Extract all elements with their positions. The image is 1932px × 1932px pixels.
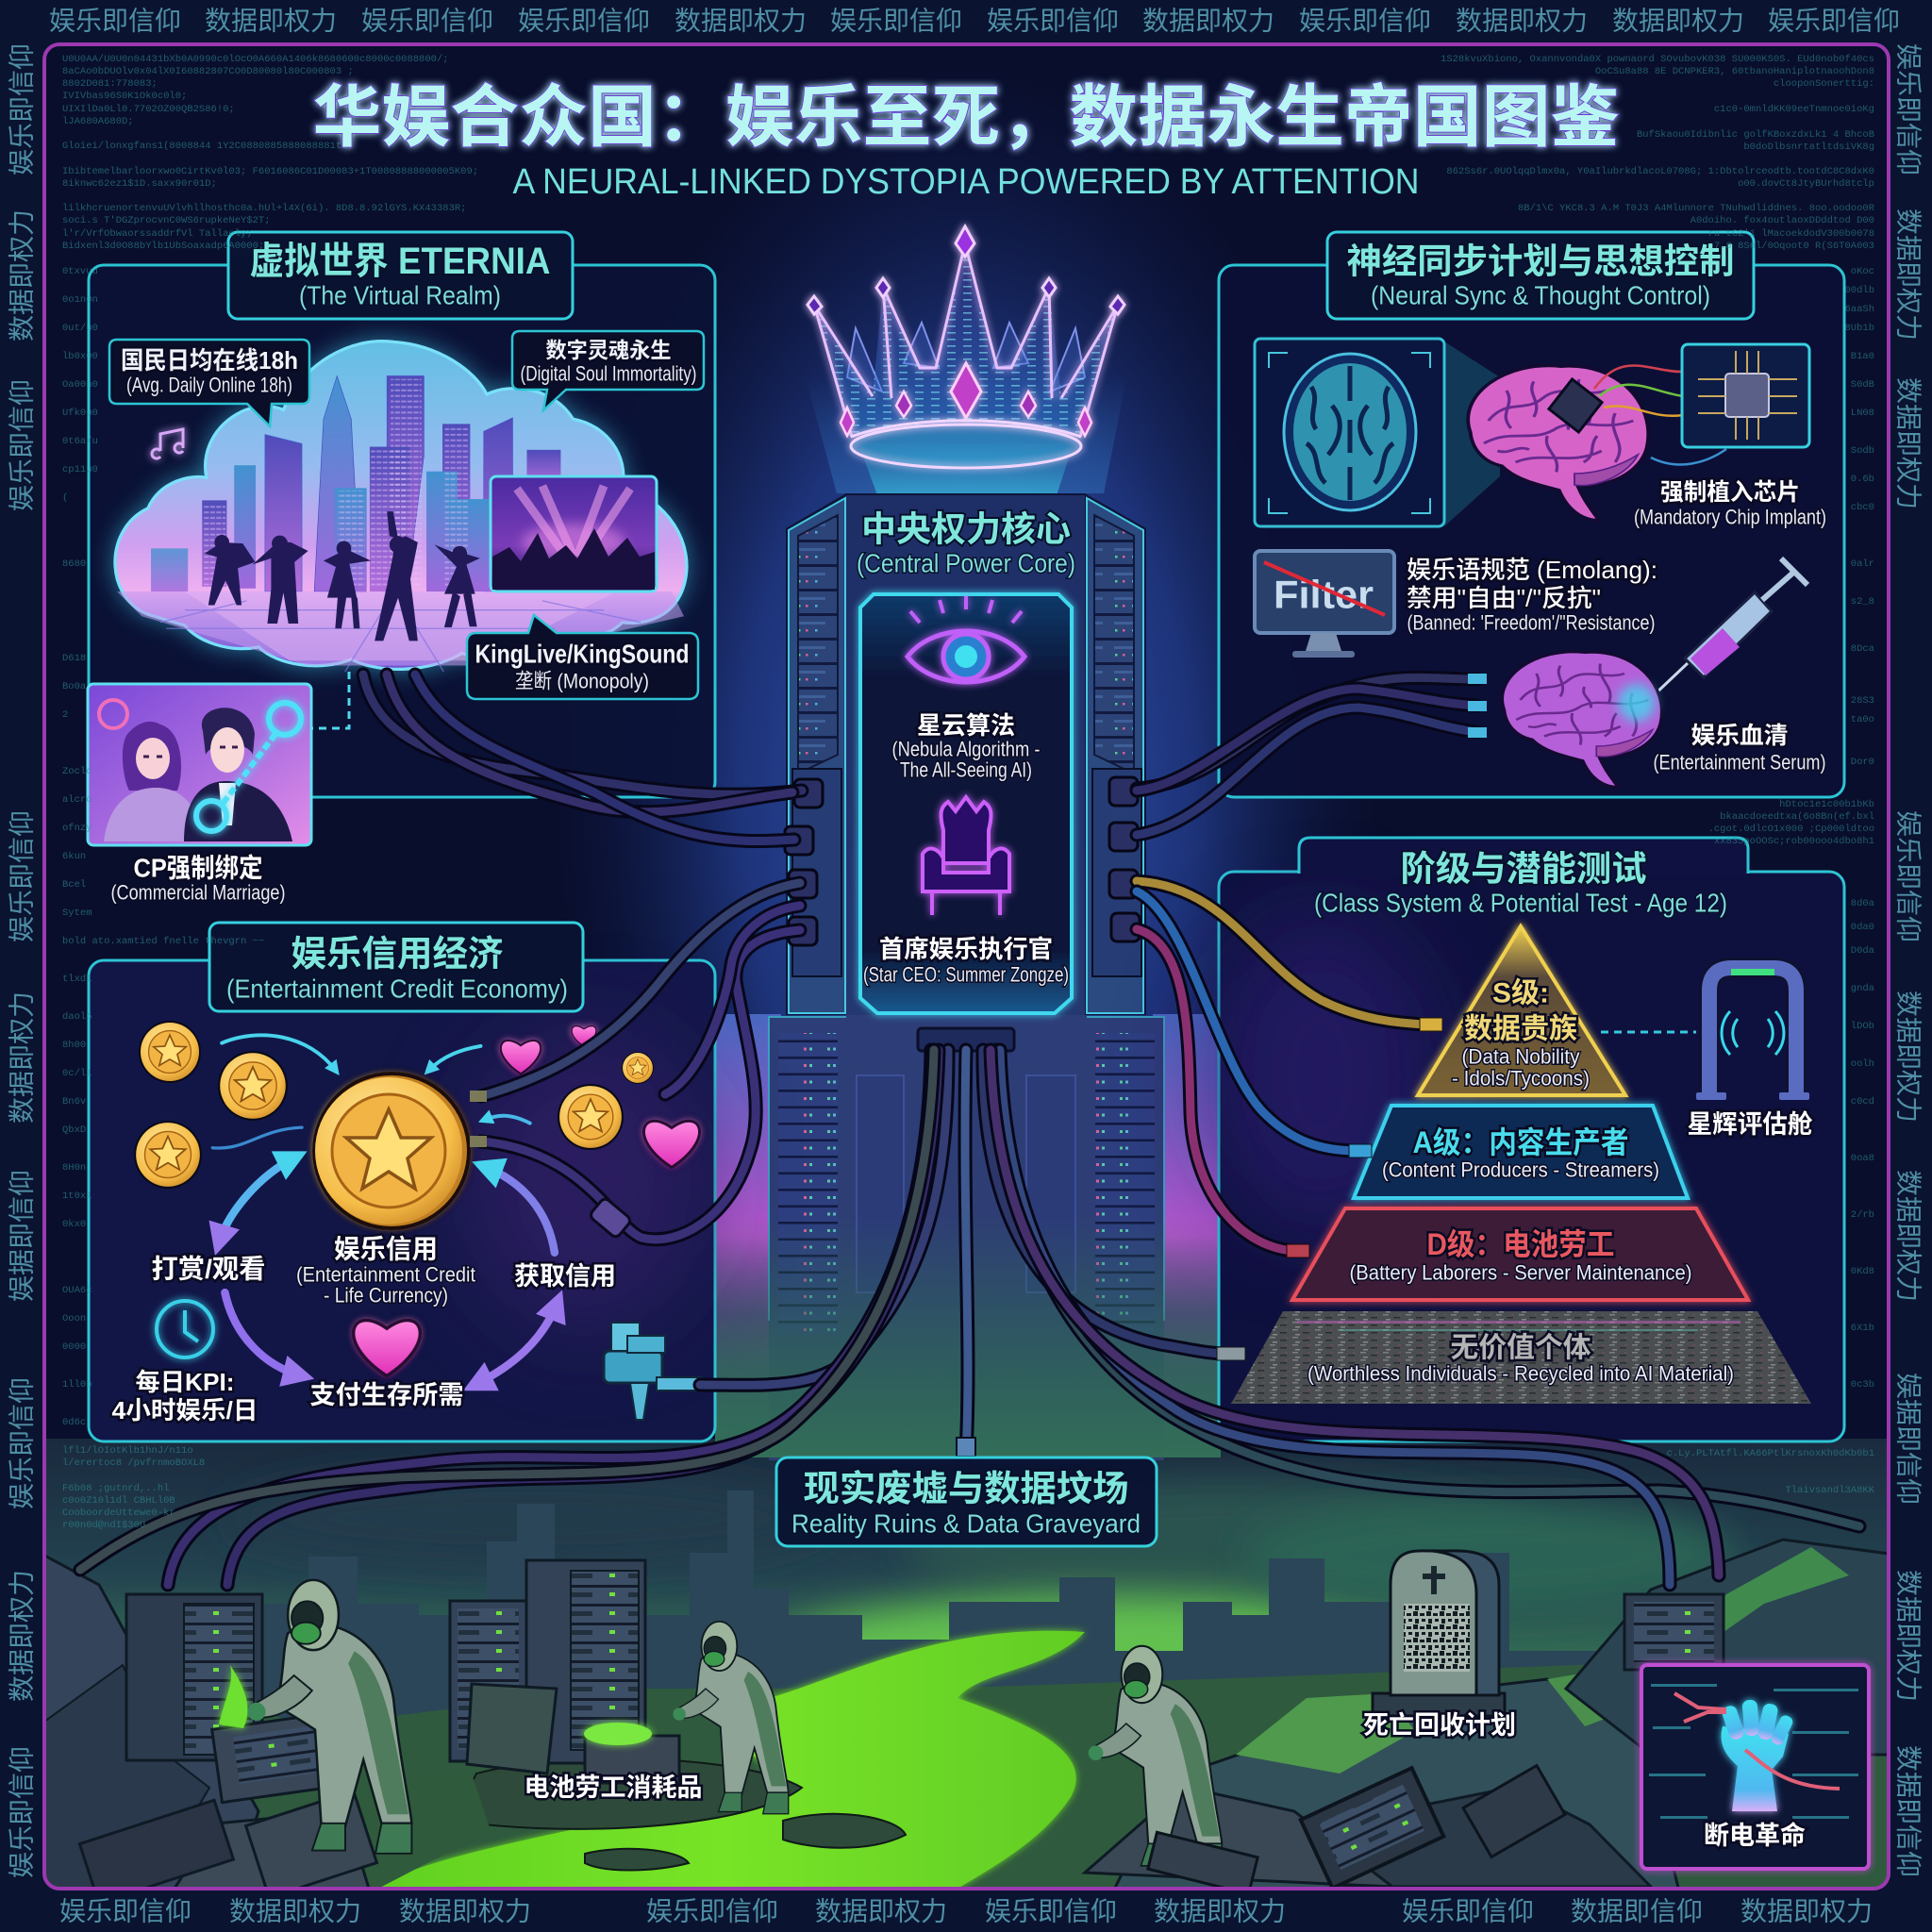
code stream right column: D0da: [1851, 945, 1874, 957]
upper rack left: [798, 515, 838, 774]
code stream left column: 1t0x1: [62, 1191, 92, 1202]
callout: digital soul: [512, 331, 704, 410]
label: serum: (Entertainment Serum): [1653, 751, 1826, 774]
cable socket: [918, 1028, 1014, 1051]
tombstone with QR code: [1373, 1551, 1505, 1716]
hazmat worker 1: [247, 1580, 411, 1854]
margin slogans top: 数据即权力: [205, 6, 337, 36]
margin slogans bottom: 数据即信仰: [1571, 1896, 1703, 1926]
code stream right column: oKoc: [1851, 266, 1874, 277]
purple backdrop left of tower: [715, 1014, 781, 1457]
margin slogans bottom: 娱乐即信仰: [985, 1896, 1117, 1926]
label: chip implant: 强制植入芯片: [1660, 478, 1800, 506]
code stream left column: 0d6c: [62, 1417, 86, 1428]
text labels: 娱乐信用: [334, 1234, 438, 1264]
label: battery consumables: 电池劳工消耗品: [525, 1774, 702, 1802]
margin slogans left: 数据即权力: [8, 209, 36, 341]
pyramid: A tier: A级：内容生产者: [1413, 1125, 1628, 1159]
margin slogans bottom: 数据即权力: [1740, 1896, 1873, 1926]
code stream right column: .cgot.0dlcO1x000 ;Cp000ldtoo: [1708, 824, 1874, 835]
margin slogans bottom: 数据即权力: [229, 1896, 361, 1926]
brain with chip: [1468, 366, 1726, 521]
code stream left column: 0ut/u0: [62, 323, 98, 334]
margin slogans top: 娱乐即信仰: [518, 6, 650, 36]
code stream top left: lJA680A680D;: [62, 116, 134, 127]
margin slogans right: [1894, 43, 1923, 1877]
label: evaluation pod: 星辉评估舱: [1687, 1110, 1813, 1139]
purple backdrop right of tower: [1153, 1014, 1221, 1457]
pyramid: A tier: (Content Producers - Streamers): [1382, 1158, 1659, 1181]
heading: class system: (Class System & Potential Test - Age 12): [1314, 889, 1727, 917]
margin slogans right: 数据即权力: [1894, 208, 1923, 341]
central tower labels: 中央权力核心: [861, 509, 1071, 549]
callout: daily online: (Avg. Daily Online 18h): [126, 374, 292, 396]
code stream left column: 0kx0: [62, 1219, 86, 1230]
callout: digital soul: (Digital Soul Immortality): [521, 362, 696, 385]
left rocks: [38, 1552, 258, 1891]
hologram crown: [808, 226, 1124, 468]
code stream right column: c.Ly.PLTAtfl.KA66PtlKrsnoxKh0dKb0b1: [1666, 1448, 1874, 1459]
debris computers: [1148, 1766, 1565, 1894]
pyramid: S tier: S级:: [1492, 977, 1549, 1009]
margin slogans bottom: 娱乐即信仰: [646, 1896, 778, 1926]
code stream top right: c1c0-0mnldKK09eeTnmnoe0ioKg: [1714, 104, 1874, 115]
pyramid: worthless tier: [1231, 1311, 1811, 1404]
label: CP: (Commercial Marriage): [111, 881, 285, 904]
code stream left column: Sytem: [62, 908, 92, 919]
monitor: filter banned: [1255, 551, 1394, 658]
margin slogans top: 数据即权力: [1612, 6, 1744, 36]
CP panel: [88, 684, 311, 845]
code stream right column: B1a0: [1851, 351, 1874, 362]
heading: neural sync: (Neural Sync & Thought Control): [1371, 281, 1710, 309]
label: chip implant: [1634, 478, 1826, 528]
code stream top left: 8iknwc62ez1$1D.saxx90r01D;: [62, 178, 217, 190]
text: emolang: (Banned: 'Freedom'/"Resistance): [1407, 611, 1655, 634]
code stream right column: Sodb: [1851, 445, 1874, 457]
margin slogans top: 数据即权力: [1142, 6, 1274, 36]
code stream right column: 6X1b: [1851, 1323, 1874, 1334]
code stream top right: b0doDlbsnrtatltdsiVK8g: [1743, 142, 1874, 153]
concert stage: [491, 476, 657, 591]
code stream top left: lilkhcruenortenvuUVlvhllhosthc0a.hUl+l4X(6i). 8D8.8.92lGYS.KX43383R;: [62, 203, 466, 214]
toxic ground: [253, 1664, 1887, 1887]
code stream left column: 2: [62, 709, 68, 721]
code stream left column: (: [62, 492, 68, 504]
dashed link: [311, 672, 349, 728]
code stream right column: 8d0a: [1851, 898, 1874, 909]
callout: daily online: [109, 340, 309, 426]
code stream right column: Dor0: [1851, 757, 1874, 768]
margin slogans top: 数据即权力: [675, 6, 807, 36]
wide hologram beam: [805, 375, 1127, 493]
margin slogans top: 娱乐即信仰: [830, 6, 962, 36]
code stream top left: IVIVbas96S0K1Ok0c0l0;: [62, 91, 187, 102]
central tower labels: 星云算法: [917, 711, 1015, 740]
code stream left column: Bo0a: [62, 681, 86, 692]
margin slogans bottom: 娱乐即信仰: [59, 1896, 192, 1926]
margin slogans top: 娱乐即信仰: [1299, 6, 1431, 36]
back spikes: [847, 323, 1085, 391]
margin slogans bottom: 数据即权力: [399, 1896, 531, 1926]
text: emolang: 禁用"自由"/"反抗": [1407, 584, 1601, 612]
skyline: [117, 375, 684, 672]
handcuffs: [196, 703, 301, 831]
code stream top right: BufSkaou0Idibnlic golfKBoxzdxLk1 4 BhcoB: [1637, 129, 1874, 141]
central tower labels: (Central Power Core): [857, 549, 1075, 577]
ring neon: [99, 700, 127, 728]
panel: neural sync: [1219, 232, 1844, 797]
text: emolang: [1407, 556, 1657, 634]
chip close-up: [1682, 344, 1809, 447]
label: serum: 娱乐血清: [1690, 723, 1789, 749]
code stream left column: 0o1n0n: [62, 294, 98, 306]
code stream right column: oolh: [1851, 1058, 1874, 1070]
margin slogans left: 数据即权力: [8, 1570, 36, 1702]
port panel right: [1092, 769, 1141, 976]
central blue glow: [591, 129, 1341, 1016]
margin slogans top: 数据即权力: [1456, 6, 1588, 36]
pyramid: S tier: - Idols/Tycoons): [1452, 1066, 1590, 1091]
subtitle: A NEURAL-LINKED DYSTOPIA POWERED BY ATTENTION: [513, 162, 1419, 202]
code stream left column: daol5: [62, 1011, 92, 1023]
code stream right column: 0oa8: [1851, 1153, 1874, 1164]
icon: all-seeing eye: [908, 596, 1024, 682]
title: 华娱合众国：娱乐至死，数据永生帝国图鉴: [313, 80, 1619, 156]
panel: virtual world: [89, 232, 715, 797]
margin slogans left: 娱乐即信仰: [8, 1377, 36, 1509]
margin slogans left: 娱乐即信仰: [8, 379, 36, 511]
code stream right column: gnda: [1851, 983, 1874, 994]
margin slogans top: [49, 6, 1900, 36]
code stream right column: hDtoc1e1c00b1bKb: [1779, 799, 1874, 810]
flow arrows: [212, 1035, 558, 1385]
code stream top right: OoCSu8a88 8E DCNPKER3, 60tbanoHaniplotnaoohDon8: [1595, 66, 1874, 77]
code stream left column: ofnzy: [62, 823, 92, 834]
margin slogans top: 娱乐即信仰: [987, 6, 1119, 36]
callout: kinglive monopoly: [467, 615, 698, 699]
code stream left column: CooboordeUttewe0-kr: [62, 1507, 175, 1519]
pyramid: D tier: (Battery Laborers - Server Maintenance): [1349, 1260, 1692, 1285]
code stream left column: tlxd1: [62, 974, 92, 985]
code stream left column: Oa00n0: [62, 379, 98, 391]
code stream right column: LN08: [1851, 408, 1874, 419]
syringe: [1653, 558, 1807, 696]
code stream right column: 00dlb: [1844, 285, 1874, 296]
text labels: 支付生存所需: [309, 1381, 464, 1409]
margin slogans right: 娱据即信仰: [1894, 1373, 1923, 1505]
hazmat worker 2: [673, 1622, 789, 1814]
code stream top right: o00.dovCt8JtyBUrhd8tclp: [1738, 178, 1874, 190]
hearts: [354, 1026, 700, 1376]
central tower labels: The All-Seeing AI): [900, 758, 1032, 781]
text labels: [111, 1234, 616, 1424]
margin slogans left: 娱乐即信仰: [8, 43, 36, 175]
code stream top right: ru tC2'1 lMacoekdodV300b0078: [1708, 228, 1874, 240]
code stream left column: lfl1/lOIotKlb1hnJ/n11o: [62, 1445, 193, 1457]
code stream left column: OUA6c: [62, 1285, 92, 1296]
brain with serum: [1502, 652, 1662, 787]
icon: clock: [157, 1301, 213, 1357]
code stream left column: 0t6a/u: [62, 436, 98, 447]
icon: raised fist: [1721, 1699, 1794, 1811]
code stream left column: Zoclc: [62, 766, 92, 777]
code stream right column: 0alr: [1851, 558, 1874, 570]
code stream top left: 8aCAo0bDUOlv0x04lX0I60882807CO0D80080l80C000803 ;: [62, 66, 354, 77]
port panel left: [785, 769, 841, 976]
code stream left column: F6b08 ;gutnrd,..hl: [62, 1483, 169, 1494]
code stream left column: 8680: [62, 558, 86, 570]
code stream left column: cp11u0: [62, 464, 98, 475]
code stream top right: clooponSonerttig:: [1774, 78, 1874, 90]
heading: class system: 阶级与潜能测试: [1400, 849, 1647, 889]
code stream right column: c0cd: [1851, 1096, 1874, 1108]
panel: class system: [1208, 838, 1844, 1441]
code stream left column: l/erertoc8 /pvfrnmoBOXL8: [62, 1457, 205, 1469]
margin slogans right: 娱乐即信仰: [1894, 43, 1923, 175]
evaluation portal: [1601, 968, 1809, 1100]
code stream top right: 1S28kvuXbiono, Oxannvonda0X pownaord SOvubovK038 SU000KS0S. EUd0nob0f40cs: [1441, 54, 1874, 65]
lower rack left: [769, 1017, 846, 1460]
heading: credit economy: [209, 923, 583, 1011]
text labels: 获取信用: [514, 1262, 616, 1291]
hazmat worker 3: [1089, 1646, 1222, 1868]
code stream right column: Tlaivsandl3A8KK: [1785, 1485, 1875, 1496]
code stream left column: lb0x00: [62, 351, 98, 362]
ruined skyline: [208, 1491, 1602, 1726]
dancers: [205, 511, 480, 641]
code stream right column: 8Dca: [1851, 643, 1874, 655]
callout: kinglive monopoly: KingLive/KingSound: [475, 640, 689, 668]
label: chip implant: (Mandatory Chip Implant): [1634, 506, 1826, 528]
label box: reality ruins: 现实废墟与数据坟场: [804, 1470, 1128, 1509]
code stream right column: lDOb: [1851, 1021, 1874, 1032]
small coins: [134, 1021, 654, 1189]
icon: big gold coin: [314, 1074, 469, 1228]
cloud city: [115, 341, 687, 669]
right scene server: [1624, 1594, 1724, 1670]
couple: [104, 708, 292, 841]
margin slogans left: 数据即权力: [8, 991, 36, 1124]
severed cable: [1674, 1693, 1840, 1789]
label box: reality ruins: Reality Ruins & Data Graveyard: [791, 1509, 1141, 1538]
central tower labels: [857, 509, 1075, 987]
code stream left column: 1ll0b: [62, 1379, 92, 1391]
toxic river: [363, 1631, 1085, 1891]
central tower: [715, 493, 1221, 1464]
code stream left column: QbxD: [62, 1124, 86, 1136]
code stream left column: 8H0n: [62, 1162, 86, 1174]
code stream left column: alcro: [62, 794, 92, 806]
display screen: [860, 594, 1072, 1013]
heading: class system: [1299, 838, 1748, 917]
code stream top left: U0U0AA/U0U0n04431bXb0A0990c0lOcO0A660A1406k8680600c8000c0088800/;: [62, 54, 449, 65]
code stream left column: D618: [62, 653, 86, 664]
code stream left column: Bcel: [62, 879, 86, 891]
label: CP: [111, 853, 285, 904]
margin slogans bottom: 数据即权力: [1154, 1896, 1286, 1926]
code stream right column: 2/rb: [1851, 1209, 1874, 1221]
upper rack right: [1094, 515, 1134, 774]
central hologram beam: [858, 443, 1074, 495]
label: CP: CP强制绑定: [134, 853, 262, 883]
margin slogans right: 数据即权力: [1894, 377, 1923, 509]
pyramid: S tier: (Data Nobility: [1462, 1045, 1579, 1068]
code stream top left: UIXIlDa0Ll0.7702OZ00QB2S86!0;: [62, 104, 235, 115]
code stream top left: 8802D081:778083;: [62, 78, 158, 90]
heading: neural sync: [1327, 232, 1754, 319]
margin slogans left: 娱据即信仰: [8, 1170, 36, 1302]
monitor: filter banned: Filter: [1274, 572, 1374, 617]
margin slogans bottom: 娱乐即信仰: [1402, 1896, 1534, 1926]
callout: kinglive monopoly: 垄断 (Monopoly): [515, 670, 649, 692]
central tower labels: 首席娱乐执行官: [879, 935, 1053, 963]
label: serum: [1653, 723, 1826, 774]
text labels: - Life Currency): [324, 1283, 448, 1307]
panel: power-off revolution: [1641, 1665, 1869, 1869]
margin slogans top: 娱乐即信仰: [361, 6, 493, 36]
margin slogans right: 娱乐即信仰: [1894, 810, 1923, 942]
code stream right column: S0dB: [1851, 379, 1874, 391]
margin slogans right: 数据即权力: [1894, 1170, 1923, 1302]
margin slogans right: 数据即权力: [1894, 991, 1923, 1123]
text labels: 每日KPI:: [136, 1368, 234, 1396]
code stream left column: c0o0Z10l1dl CBHLl0B: [62, 1495, 175, 1507]
cloud glow: [115, 341, 687, 669]
code stream right column: ta0o: [1851, 714, 1874, 725]
code stream right column: cbc0: [1851, 502, 1874, 513]
code stream left column: Bn6v: [62, 1096, 86, 1108]
lower rack right: [1087, 1017, 1164, 1460]
central tower labels: (Star CEO: Summer Zongze): [863, 962, 1069, 987]
left scene servers: [79, 1560, 679, 1903]
fade of tower into scene: [715, 1217, 1221, 1457]
code stream top left: soci.s T'DGZprocvnC0WS6rupkeNeY$2T;: [62, 215, 271, 226]
pyramid: worthless tier: (Worthless Individuals - Recycled into AI Material): [1307, 1362, 1734, 1385]
pyramid: S tier: 数据贵族: [1464, 1013, 1577, 1045]
text labels: 打赏/观看: [151, 1255, 266, 1283]
text: emolang: 娱乐语规范 (Emolang):: [1407, 556, 1657, 584]
cable plugs: [470, 674, 1487, 1457]
code stream left column: 6kun: [62, 851, 86, 862]
code stream left column: Ufk0u0: [62, 408, 98, 419]
code stream right column: xx83SpoOOSc;rob00ooo4dbo8h1: [1714, 836, 1874, 847]
cables: [80, 675, 1859, 1585]
margin slogans left: 娱乐即信仰: [8, 810, 36, 942]
heading: virtual realm: 虚拟世界 ETERNIA: [249, 241, 551, 282]
panel: credit economy: [89, 923, 715, 1441]
margin slogans top: 娱乐即信仰: [1768, 6, 1900, 36]
heading: neural sync: 神经同步计划与思想控制: [1347, 242, 1734, 281]
pyramid: A tier: [1354, 1106, 1688, 1198]
icon: plug connector: [604, 1323, 702, 1420]
text labels: 4小时娱乐/日: [111, 1396, 258, 1424]
code stream left column: 0txvuu: [62, 266, 98, 277]
pyramid: D tier: D级：电池劳工: [1426, 1227, 1615, 1261]
pyramid: worthless tier: 无价值个体: [1451, 1332, 1591, 1364]
code stream left column: 0000: [62, 1341, 86, 1353]
code stream top right: A0doiho. fox4outlaoxDDddtod D00: [1690, 215, 1874, 226]
reality ruins scene: [38, 1439, 1896, 1891]
code stream top right: 8B/1\C YKC8.3 A.M T0J3 A4Mlunnore TNuhwdliddnes. 8oo.oodoo0R: [1518, 203, 1875, 214]
pyramid: S tier: [1418, 926, 1625, 1095]
code stream right column: 0Kd8: [1851, 1266, 1874, 1277]
code stream right column: 0.6b: [1851, 474, 1874, 485]
code stream left column: r00n0d@ndI$30U: [62, 1520, 145, 1531]
central tower labels: (Nebula Algorithm -: [892, 738, 1040, 760]
code stream top right: 862Ss6r.0UOlqqDlmx0a, Y0aIlubrkdlacoL0708G; 1:Dbtolrceodtb.tootdC8C8dxK0: [1446, 166, 1874, 177]
margin slogans bottom: 数据即权力: [815, 1896, 947, 1926]
label: death recycling: 死亡回收计划: [1363, 1711, 1516, 1740]
lower tower body: [845, 1011, 1087, 1464]
code stream top left: l'r/VrfObwaorssaddrfVl Tallaely;: [62, 228, 253, 240]
margin slogans left: [8, 43, 36, 1878]
upper tower: [786, 493, 1146, 1015]
callout: daily online: 国民日均在线18h: [121, 346, 298, 375]
code stream left column: 0c/l1: [62, 1068, 92, 1079]
pyramid: D tier: [1292, 1208, 1748, 1300]
icon: throne: [923, 797, 1009, 915]
code stream top left: Ibibtemelbarloorxwo0CirtKv0l03; F6016086C01D00083+1T00808888000005K09;: [62, 166, 478, 177]
code stream left column: 8h00: [62, 1040, 86, 1051]
code stream left column: bold ato.xamtied fnelle thevgrn ~~: [62, 936, 264, 947]
callout: digital soul: 数字灵魂永生: [545, 338, 672, 362]
code stream left column: Ooon: [62, 1313, 86, 1324]
code stream right column: s2_8: [1851, 596, 1874, 608]
glitch lines: [1649, 1684, 1858, 1819]
panel: power-off revolution: 断电革命: [1704, 1821, 1806, 1850]
code stream top left: Bidxenl3d0O88bYlb1UbSoaxadp6A0000;: [62, 241, 264, 252]
margin slogans right: 数据即权力: [1894, 1570, 1923, 1702]
icon: music note: [152, 429, 183, 458]
margin slogans left: 娱乐即信仰: [8, 1746, 36, 1878]
heading: credit economy: 娱乐信用经济: [291, 935, 504, 974]
code stream top right: 7.8 8S6l/0Oqoot0 R(S6T0A003: [1714, 241, 1874, 252]
code stream right column: 0c3b: [1851, 1379, 1874, 1391]
margin slogans top: 娱乐即信仰: [49, 6, 181, 36]
code stream top left: Gloiei/lonxgfans1(8008844 1Y2C0880885888088881ti;: [62, 141, 354, 152]
code stream right column: 0da0: [1851, 922, 1874, 933]
margin slogans bottom: [59, 1896, 1873, 1926]
code stream right column: 28S3: [1851, 695, 1874, 707]
code stream right column: 6aaSh: [1844, 304, 1874, 315]
brain scan: [1255, 339, 1500, 526]
margin slogans right: 数据即信仰: [1894, 1745, 1923, 1877]
text labels: (Entertainment Credit: [296, 1262, 475, 1287]
code stream right column: bkaacdoeedtxa(6o8Bn(ef.bxl: [1720, 811, 1874, 823]
heading: virtual realm: [228, 232, 573, 319]
label box: reality ruins: [776, 1457, 1157, 1546]
mud banks: [453, 1758, 906, 1870]
right debris mounds: [1113, 1679, 1679, 1891]
code stream right column: 8Ub1b: [1844, 323, 1874, 334]
heading: credit economy: (Entertainment Credit Economy): [226, 974, 568, 1004]
heading: virtual realm: (The Virtual Realm): [299, 281, 501, 309]
